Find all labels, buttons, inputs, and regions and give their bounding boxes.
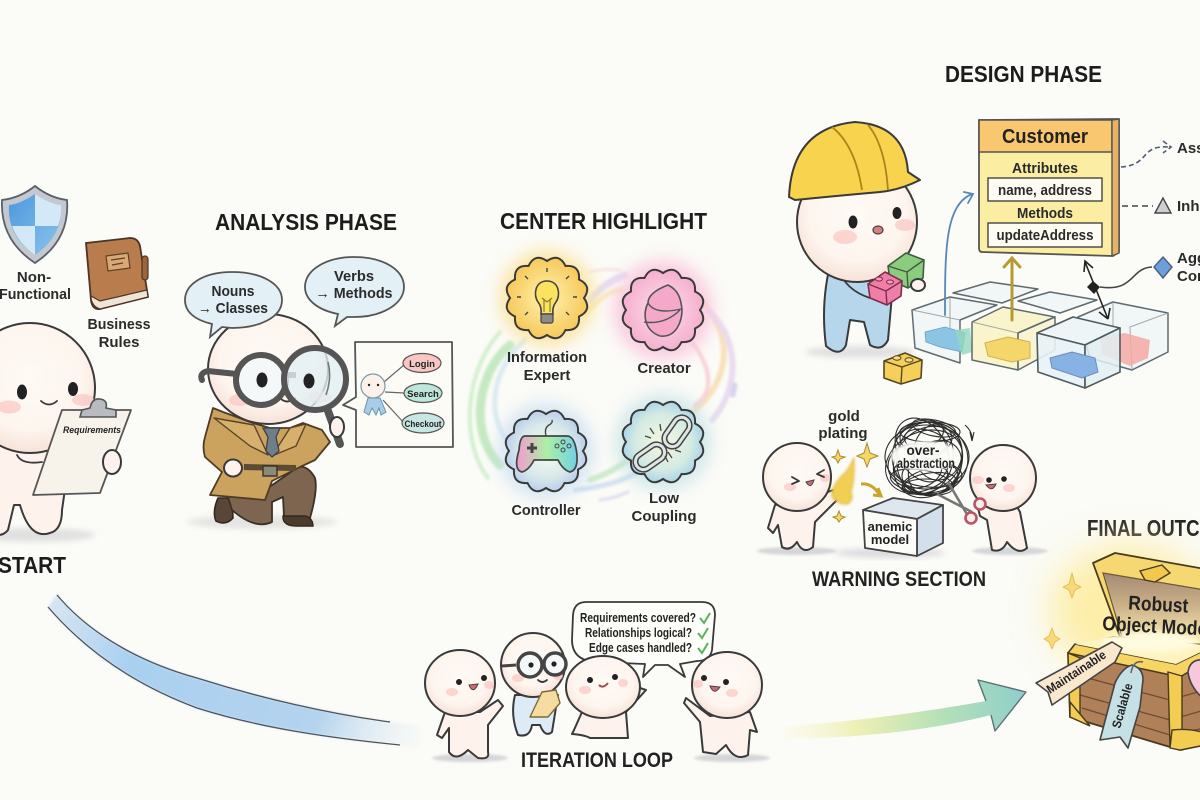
speech bubble: verbs to methods [305,257,404,326]
title: START: START [0,552,66,578]
icon: business rules book [86,238,148,309]
arrow: gold up [1004,258,1020,320]
box: anemic model [835,498,945,558]
speech bubble: review checklist: Relationships logical? [585,626,692,640]
tag: Maintainable: Maintainable [1044,648,1109,697]
character: builder with hard hat [789,122,925,358]
diagram: use cases: Search [407,389,439,400]
arrow: to final outcome [782,680,1026,739]
character: team member with glasses [501,633,566,736]
class card: Customer: name, address [998,182,1092,199]
label: Business Rules: Rules [99,334,139,351]
tag: pink heart [1188,660,1200,700]
label: gold plating: gold [828,408,860,425]
class card: Customer: Methods [1017,205,1073,222]
tag: Maintainable [1036,642,1122,705]
label: Low Coupling: Low [649,490,679,507]
title: WARNING SECTION: WARNING SECTION [812,568,986,591]
title: ITERATION LOOP: ITERATION LOOP [521,749,673,772]
box: anemic model: model [871,532,909,547]
class card: Customer: updateAddress [996,227,1094,244]
icon: shield [2,186,67,263]
character: scissors right [937,445,1048,555]
badge: information expert [499,250,595,346]
character: start with clipboard [0,323,131,542]
badge: controller [498,403,594,499]
label: Business Rules [88,316,150,351]
arrow: association [1121,141,1171,167]
tag: Scalable: Scalable [1109,682,1136,730]
label: Aggregation / Composition [1177,250,1200,285]
badge: low coupling [615,394,711,490]
character: team member right [684,652,770,762]
label: Low Coupling: Coupling [632,508,696,525]
character: team member centre [566,656,646,738]
label: Non-Functional: Functional [0,286,71,303]
title: DESIGN PHASE: DESIGN PHASE [945,61,1102,87]
class card: Customer: Attributes [1012,160,1078,177]
title: ANALYSIS PHASE: ANALYSIS PHASE [215,209,397,235]
scribble: over-abstraction [875,409,978,512]
arrow: aggregation [1100,257,1172,288]
box: anemic model: anemic [868,519,912,534]
diagram: use cases: Login [409,359,435,370]
diagram: use cases [343,342,453,447]
character: gold plating left [757,443,837,555]
label: Low Coupling [632,490,696,525]
class card: Customer [979,119,1119,256]
speech bubble: nouns to classes: → Classes [198,300,268,317]
badge: creator [613,260,713,360]
label: Information Expert: Information [507,349,587,366]
scribble: over-abstraction: over- [906,443,940,458]
speech bubble: review checklist: Edge cases handled? [589,641,692,655]
sparkle burst [832,443,881,522]
label: Business Rules: Business [88,316,150,333]
speech bubble: verbs to methods: → Methods [316,285,392,302]
label: gold plating [818,408,868,442]
tag: Scalable [1100,662,1143,748]
curve: start path [48,595,420,748]
speech bubble: review checklist [572,602,715,677]
label: Non-Functional [0,269,71,303]
arrow: inheritance [1122,198,1171,213]
speech bubble: review checklist: Requirements covered? [580,611,696,625]
yellow brick [884,353,922,384]
rainbow swirls [470,269,735,500]
arrow: black connector [1084,261,1110,319]
character: detective [187,314,346,529]
character: start with clipboard: Requirements [63,425,121,436]
treasure chest [1050,545,1200,750]
label: Information Expert [507,349,587,384]
diagram: use cases: Checkout [404,419,442,430]
arrow: bin to class [945,192,973,315]
character: team member left [425,650,508,762]
scribble: over-abstraction: abstraction [897,456,955,471]
treasure chest: Robust [1128,592,1189,618]
speech bubble: verbs to methods: Verbs [334,268,374,285]
title: CENTER HIGHLIGHT: CENTER HIGHLIGHT [500,208,707,234]
label: gold plating: plating [818,425,868,442]
sparkles [1044,573,1081,649]
label: Non-Functional: Non- [17,269,51,286]
speech bubble: nouns to classes: Nouns [212,283,254,300]
label: Controller: Controller [512,502,581,519]
glass bins [912,282,1168,388]
speech bubble: nouns to classes [185,272,282,337]
label: Information Expert: Expert [524,367,570,384]
label: Creator: Creator [637,360,691,377]
class card: Customer: Customer [1002,126,1088,148]
